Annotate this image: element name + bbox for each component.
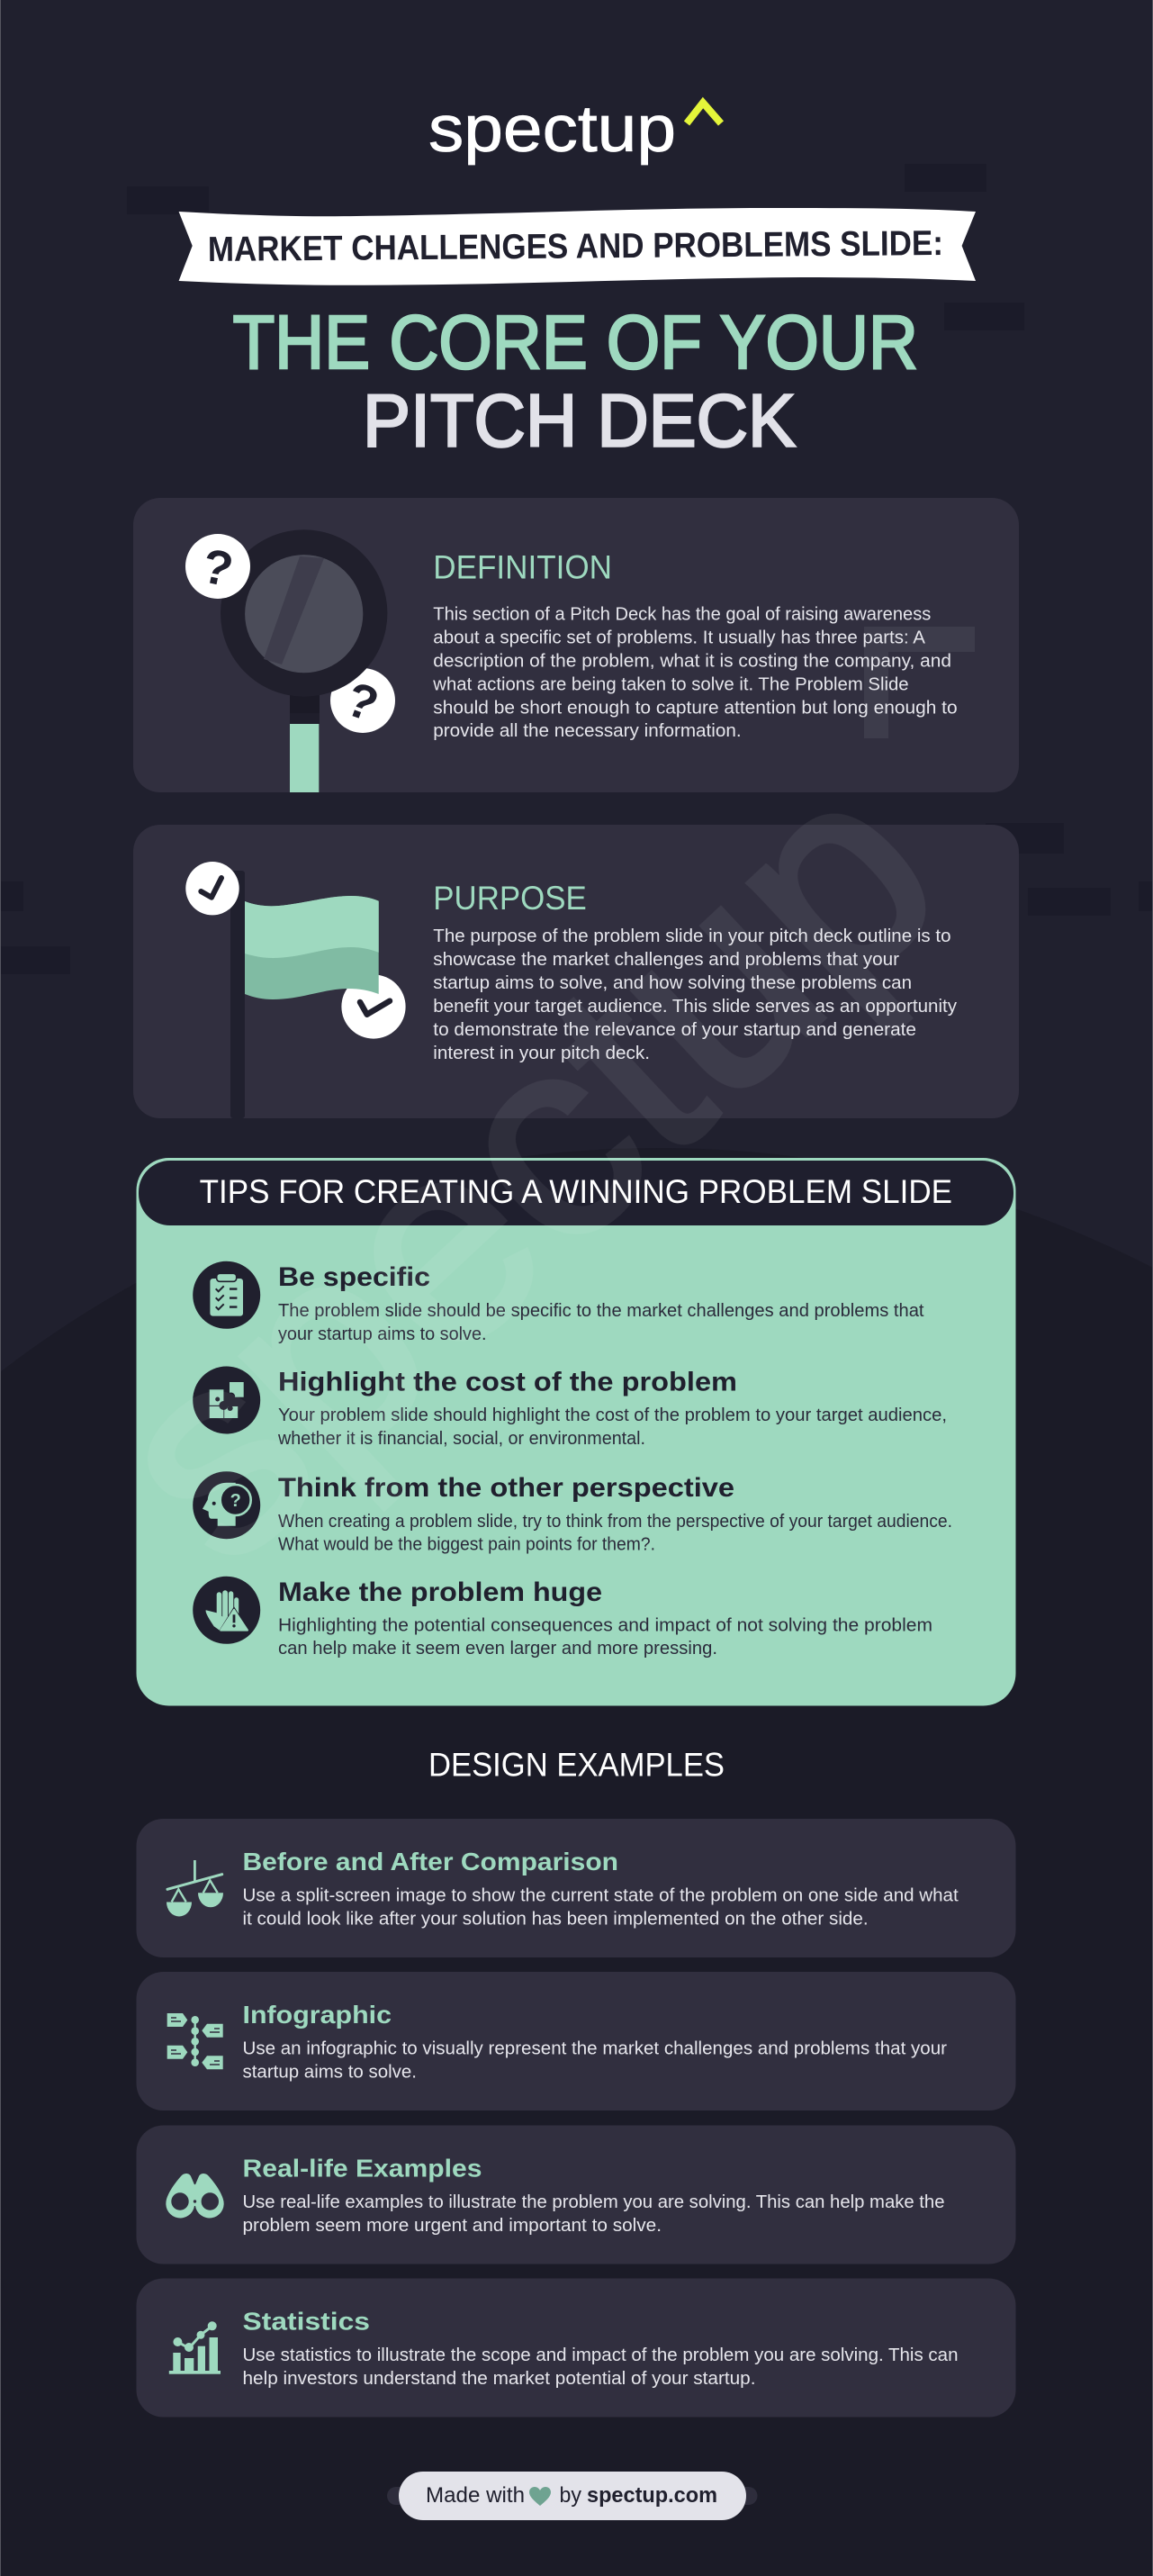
card: statistics (137, 2278, 1015, 2417)
icon: heart (529, 2487, 551, 2506)
text: definition body: what actions are being taken to solve it. The Problem Slide (432, 673, 909, 694)
title line 2: PITCH DECK (363, 379, 796, 463)
tip: be specific (193, 1261, 924, 1344)
title ribbon (179, 208, 976, 285)
tips heading: TIPS FOR CREATING A WINNING PROBLEM SLIDE (200, 1173, 952, 1210)
text: definition body: description of the problem, what it is costing the company, and (433, 651, 951, 672)
card: real-life examples: Use real-life examples to illustrate the problem you are solving. This can help make the (243, 2192, 945, 2212)
watermark: spectup: spectup (51, 710, 995, 1621)
panel: definition (133, 498, 1019, 792)
tip: think from the other perspective (193, 1471, 952, 1554)
tips header bar (139, 1161, 1013, 1225)
card: statistics: Statistics (243, 2307, 370, 2335)
text: definition body: about a specific set of problems. It usually has three parts: A (433, 627, 925, 648)
tip: make the problem huge: Make the problem huge (278, 1577, 602, 1607)
icon: clipboard checklist (193, 1261, 260, 1329)
tip: highlight the cost: Highlight the cost of the problem (278, 1368, 737, 1397)
icon: magnifying glass with question marks: ? (197, 538, 238, 598)
text: definition body: provide all the necessary information. (433, 720, 742, 741)
text: definition body: should be short enough to capture attention but long enough to (433, 697, 958, 719)
card: before and after comparison: it could look like after your solution has been implemented on the other side. (243, 1909, 869, 1929)
panel: purpose (133, 825, 1019, 1118)
title line 1: THE CORE OF YOUR (233, 300, 918, 384)
tip: be specific: Be specific (278, 1262, 430, 1292)
tip: highlight the cost: Your problem slide should highlight the cost of the problem to your target audience, (278, 1406, 947, 1425)
icon: hand with warning triangle (193, 1577, 260, 1644)
tip: make the problem huge: Highlighting the potential consequences and impact of not solving the problem (278, 1616, 932, 1636)
card: statistics: Use statistics to illustrate the scope and impact of the problem you are solving. This can (243, 2346, 958, 2365)
text: purpose body: showcase the market challenges and problems that your (433, 949, 899, 970)
icon: puzzle pieces (193, 1367, 260, 1433)
heading: purpose: PURPOSE (433, 880, 587, 917)
card: before and after comparison: Use a split-screen image to show the current state of the problem on one side and what (243, 1886, 959, 1906)
icon: magnifying glass with question marks: ? (339, 672, 385, 733)
text: purpose body: interest in your pitch deck. (433, 1043, 650, 1063)
panel: tips (137, 1158, 1015, 1705)
tip: make the problem huge: can help make it seem even larger and more pressing. (278, 1639, 717, 1659)
text: purpose body: The purpose of the problem slide in your pitch deck outline is to (433, 926, 950, 946)
card: before and after comparison (137, 1819, 1015, 1957)
icon: head with question mark (193, 1471, 260, 1539)
card: real-life examples (137, 2125, 1015, 2264)
text: purpose body: to demonstrate the relevance of your startup and generate (433, 1019, 916, 1040)
tip: think from the other perspective: Think from the other perspective (278, 1473, 734, 1503)
heading: design examples: DESIGN EXAMPLES (428, 1746, 725, 1783)
icon: infographic diagram (167, 2013, 223, 2069)
text: purpose body: startup aims to solve, and how solving these problems can (433, 972, 912, 993)
heading: definition: DEFINITION (433, 548, 612, 585)
footer: made with love: by (560, 2483, 581, 2508)
icon: balance scales (167, 1860, 223, 1916)
tip: make the problem huge (193, 1577, 932, 1659)
card: statistics: help investors understand the market potential of your startup. (243, 2369, 755, 2389)
footer: made with love: Made with (426, 2483, 525, 2508)
footer: made with love: spectup.com (587, 2483, 717, 2508)
icon: bar chart with trend line (169, 2321, 221, 2374)
logo: spectup: spectup (428, 93, 676, 166)
text: definition body (432, 603, 958, 741)
card: real-life examples: Real-life Examples (243, 2154, 482, 2182)
card: before and after comparison: Before and After Comparison (243, 1848, 618, 1876)
tip: highlight the cost (193, 1367, 947, 1449)
card: infographic: startup aims to solve. (243, 2062, 417, 2082)
tip: think from the other perspective: What would be the biggest pain points for them?. (278, 1534, 655, 1554)
icon: binoculars (166, 2174, 224, 2218)
text: purpose body (433, 926, 958, 1063)
card: infographic: Use an infographic to visually represent the market challenges and problems that your (243, 2039, 947, 2059)
icon: head with question mark: ? (230, 1491, 241, 1511)
text: purpose body: benefit your target audience. This slide serves as an opportunity (433, 996, 958, 1017)
icon: magnifying glass with question marks (185, 529, 395, 792)
icon: flag with check marks (185, 862, 406, 1118)
footer: made with love (387, 2472, 758, 2520)
title ribbon: MARKET CHALLENGES AND PROBLEMS SLIDE: (208, 224, 943, 269)
text: definition body: This section of a Pitch Deck has the goal of raising awareness (433, 603, 931, 624)
tip: highlight the cost: whether it is financial, social, or environmental. (277, 1429, 645, 1449)
card: infographic (137, 1972, 1015, 2111)
tip: be specific: your startup aims to solve. (278, 1324, 486, 1344)
tip: be specific: The problem slide should be specific to the market challenges and problems that (278, 1301, 924, 1321)
card: real-life examples: problem seem more urgent and important to solve. (243, 2216, 662, 2236)
card: infographic: Infographic (243, 2001, 392, 2029)
tip: think from the other perspective: When creating a problem slide, try to think from the perspective of your target audience. (278, 1512, 952, 1532)
